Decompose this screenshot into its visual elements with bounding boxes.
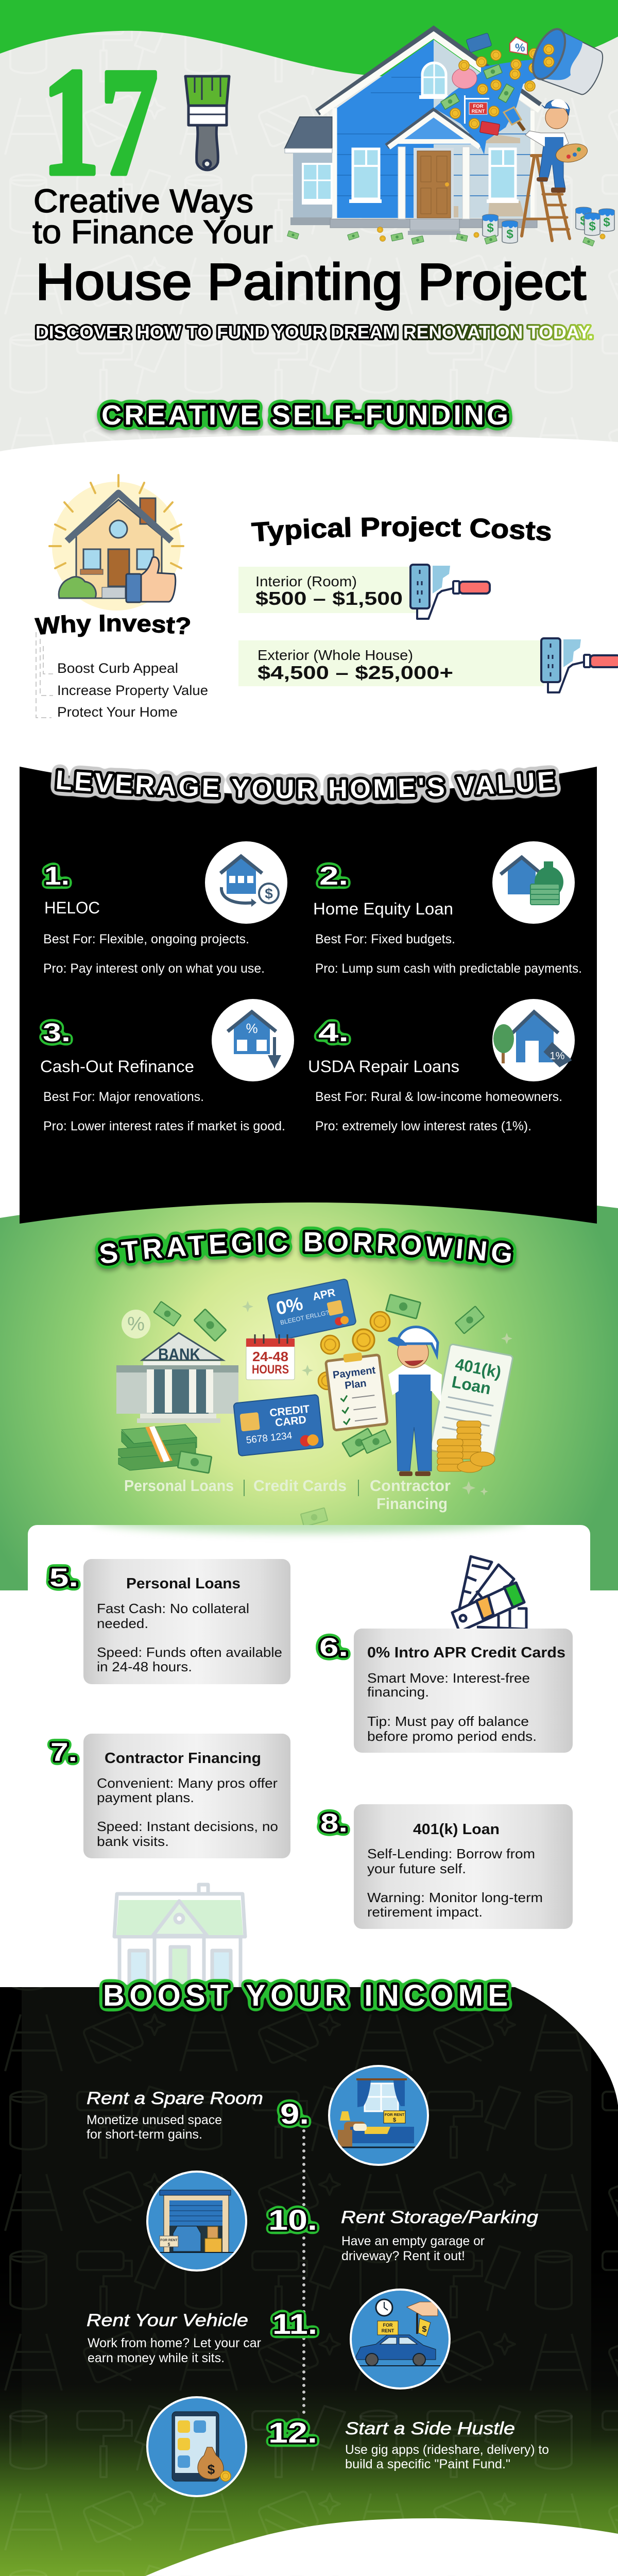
illustration: bank	[116, 1333, 238, 1423]
card text: needed.	[97, 1616, 148, 1631]
icon: paint brush	[185, 76, 229, 170]
illustration: calendar 24-48 hours: HOURS	[252, 1363, 289, 1377]
illustration: credit card: CREDIT	[269, 1403, 311, 1419]
idea 11: rent your vehicle	[87, 2290, 450, 2388]
card text: 401(k) Loan	[413, 1821, 500, 1838]
headline: Creative Ways to Finance Your	[32, 182, 273, 250]
card text	[97, 1575, 282, 1674]
text: for short-term gains.	[87, 2127, 202, 2142]
pig coins bills sign and toolbox in the stream: RENT	[472, 109, 485, 114]
icon: storage unit with car: $	[168, 2242, 170, 2247]
cost box: interior: $500 – $1,500	[255, 588, 403, 609]
badge 10: 10.	[268, 2204, 317, 2236]
heading: Creative Self-Funding: CREATIVE SELF-FUNDING	[101, 400, 508, 431]
badge 3: 3.	[43, 1018, 71, 1047]
badge 12: 12.	[268, 2416, 317, 2449]
text: HELOC: Best For: Flexible, ongoing projects.	[43, 932, 249, 946]
badge 9: 9.	[280, 2097, 309, 2130]
icon: car for rent with keys: FOR	[383, 2323, 393, 2328]
panel: why invest and project costs	[34, 474, 618, 720]
list of reasons: Increase Property Value	[57, 683, 208, 698]
illustration: credit card: CARD	[274, 1414, 307, 1429]
hero section	[0, 0, 618, 464]
icon: house with dollar: $	[265, 886, 273, 902]
heading: Boost Your Income: BOOST YOUR INCOME	[103, 1979, 508, 2012]
green top wave	[0, 0, 618, 78]
card text: Personal Loans	[126, 1575, 241, 1592]
icon: bedroom for rent: $	[393, 2117, 396, 2123]
card text: Convenient: Many pros offer	[97, 1775, 278, 1791]
heading: Leverage Your Home's Value: LEVERAGE YOUR HOME'S VALUE	[50, 765, 561, 805]
text: Work from home? Let your car	[88, 2336, 261, 2350]
text: cash-out refinance	[40, 1057, 285, 1133]
illustration: 0% APR card: APR	[312, 1286, 336, 1303]
bullet connector dashes	[36, 632, 53, 718]
illustration labels: Credit Cards	[253, 1477, 347, 1495]
illustration: bank: BANK	[158, 1345, 200, 1364]
card text	[367, 1645, 565, 1744]
icon: paint roller interior	[410, 565, 490, 619]
illustration labels: Contractor	[370, 1477, 451, 1495]
white wave background	[0, 2518, 618, 2576]
card text: financing.	[367, 1684, 429, 1700]
option 8: 401(k) loan card	[320, 1804, 573, 1929]
icon: house with thumbs up	[49, 475, 183, 611]
main wall	[337, 40, 530, 218]
illustration: contractor character	[388, 1327, 442, 1476]
card text	[97, 1750, 278, 1849]
option 4: USDA repair loans	[308, 999, 575, 1133]
icon: faded house	[114, 1885, 245, 1991]
icon: house with tree and price tag	[492, 999, 575, 1081]
section backdrop: green dome	[0, 1191, 618, 1590]
text	[341, 2208, 538, 2263]
text: cash-out refinance: Pro: Lower interest rates if market is good.	[43, 1119, 285, 1133]
icon: phone with gig apps and money bag: $	[208, 2462, 215, 2477]
card text: Warning: Monitor long-term	[367, 1890, 543, 1905]
tagline: DISCOVER HOW TO FUND YOUR DREAM RENOVATION TODAY.	[36, 323, 593, 343]
option 3: cash-out refinance	[40, 999, 294, 1133]
card text: bank visits.	[97, 1834, 169, 1849]
text: Start a Side Hustle	[345, 2419, 515, 2438]
option 1: HELOC	[43, 841, 287, 976]
icon: colour swatch fan	[452, 1556, 526, 1632]
text: driveway? Rent it out!	[341, 2249, 465, 2263]
pig coins bills sign and toolbox in the stream	[441, 48, 551, 135]
icon: phone with gig apps and money bag	[147, 2397, 246, 2496]
illustration: 401k document	[430, 1344, 513, 1462]
card text: Contractor Financing	[105, 1750, 261, 1767]
cost box: interior: Interior (Room)	[255, 573, 357, 589]
pouring blue paint stream	[434, 59, 542, 155]
text: build a specific "Paint Fund."	[345, 2457, 510, 2471]
illustration: 0% APR card	[267, 1279, 356, 1341]
badge 5: 5.	[49, 1563, 78, 1592]
illustration: 401k document: 401(k)	[454, 1354, 503, 1382]
foundation and steps	[290, 217, 537, 235]
hero background	[0, 0, 618, 464]
credit card and percent house	[466, 33, 527, 55]
badge 7: 7.	[50, 1738, 77, 1767]
panel: white card with borrowing options	[28, 1525, 590, 1987]
illustration: payment plan clipboard: Plan	[344, 1378, 367, 1392]
text: Rent Storage/Parking	[341, 2208, 538, 2227]
panel: strategic borrowing	[93, 1226, 519, 1525]
card text: before promo period ends.	[367, 1728, 537, 1744]
illustration labels	[124, 1477, 451, 1513]
icon: paint roller exterior	[541, 638, 618, 692]
text	[87, 2311, 261, 2365]
card text: Smart Move: Interest-free	[367, 1670, 530, 1686]
headline: House Painting Project: House Painting Project	[36, 253, 586, 310]
card text: your future self.	[367, 1861, 466, 1876]
card text: Self-Lending: Borrow from	[367, 1846, 535, 1861]
white lower backdrop	[0, 1590, 618, 1990]
list of reasons: Boost Curb Appeal	[57, 660, 178, 676]
text: HELOC: Pro: Pay interest only on what you use.	[43, 961, 265, 976]
illustration: cash stacks	[118, 1425, 212, 1473]
annex	[285, 117, 332, 218]
option 6: 0% intro APR credit cards card	[319, 1629, 573, 1753]
illustration labels: Financing	[376, 1495, 448, 1513]
text: home equity loan: Home Equity Loan	[313, 900, 453, 918]
text: USDA repair loans: USDA Repair Loans	[308, 1057, 459, 1076]
white card background	[28, 1525, 590, 1628]
illustration: calendar 24-48 hours: 24-48	[252, 1349, 288, 1364]
icon: car for rent with keys	[350, 2290, 450, 2388]
badge 4: 4.	[318, 1018, 349, 1047]
text	[87, 2089, 263, 2142]
text	[345, 2419, 549, 2471]
card text: retirement impact.	[367, 1904, 483, 1920]
badge 6: 6.	[319, 1633, 348, 1662]
card text: Speed: Funds often available	[97, 1645, 282, 1660]
pig coins bills sign and toolbox in the stream: FOR	[473, 104, 484, 109]
illustration: 0% APR card: 0%	[274, 1293, 305, 1319]
text: home equity loan	[313, 900, 582, 976]
windows	[349, 63, 519, 203]
card text: 0% Intro APR Credit Cards	[367, 1645, 565, 1661]
option 2: home equity loan	[313, 841, 582, 976]
illustration: house with painter and money	[285, 24, 614, 246]
idea 9: rent a spare room	[87, 2066, 428, 2165]
text: Use gig apps (rideshare, delivery) to	[345, 2443, 549, 2457]
heading: Why Invest: Why Invest?	[34, 614, 191, 637]
text: Monetize unused space	[87, 2113, 222, 2127]
illustration: floating coins and bills: %	[127, 1313, 145, 1335]
text: USDA repair loans: Pro: extremely low interest rates (1%).	[315, 1119, 531, 1133]
card text: payment plans.	[97, 1790, 194, 1805]
badge 1: 1.	[44, 861, 70, 890]
paint cans on the ground	[483, 207, 614, 243]
card text: Fast Cash: No collateral	[97, 1601, 249, 1616]
text: USDA repair loans: Best For: Rural & low-income homeowners.	[315, 1090, 562, 1104]
illustration: gold coin stacks	[437, 1421, 495, 1472]
icon: car for rent with keys: $	[422, 2325, 427, 2334]
dotted timeline	[302, 2131, 305, 2416]
white divider curve	[0, 435, 618, 464]
text: USDA repair loans	[308, 1057, 562, 1133]
icon: house with percent and down arrow	[212, 999, 294, 1081]
icon: storage unit with car: FOR RENT	[160, 2239, 178, 2242]
porch and door	[387, 111, 481, 219]
large number 17: 17	[42, 36, 158, 207]
list of reasons	[57, 660, 208, 720]
black panel background	[20, 767, 597, 1224]
text: earn money while it sits.	[88, 2351, 225, 2365]
illustration labels: Personal Loans	[124, 1477, 234, 1495]
dark edge shading	[0, 1987, 618, 2347]
text: HELOC: HELOC	[44, 899, 100, 917]
ladder	[522, 156, 570, 241]
idea 12: start a side hustle	[147, 2397, 549, 2496]
roof trim	[317, 30, 540, 219]
text: Rent Your Vehicle	[87, 2311, 248, 2330]
text: Rent a Spare Room	[87, 2089, 263, 2108]
icon: house with tree and price tag: 1%	[550, 1050, 565, 1062]
cost box: exterior: $4,500 – $25,000+	[258, 662, 453, 683]
credit card and percent house: %	[515, 41, 525, 54]
icon: storage unit with car	[147, 2172, 247, 2270]
card text: in 24-48 hours.	[97, 1659, 192, 1674]
illustration: credit card	[233, 1395, 323, 1456]
heading: Strategic Borrowing: STRATEGIC BORROWING	[93, 1226, 519, 1274]
text: HELOC	[43, 899, 265, 976]
text: home equity loan: Pro: Lump sum cash with predictable payments.	[315, 961, 582, 976]
card text: Speed: Instant decisions, no	[97, 1819, 278, 1834]
sparkles	[242, 1301, 512, 1496]
panel: creative savings and community	[0, 2518, 618, 2576]
card text	[367, 1821, 543, 1920]
icon: car for rent with keys: RENT	[382, 2328, 394, 2333]
option 5: personal loans card	[49, 1559, 290, 1684]
icon: house with money bags	[492, 841, 575, 924]
money on the ground	[287, 227, 605, 246]
tipped paint can	[526, 24, 609, 100]
cost box: interior	[238, 567, 419, 613]
illustration: payment plan clipboard	[325, 1350, 387, 1430]
headline: Creative Ways to Finance Your: Creative Ways	[33, 182, 253, 219]
icon: bedroom for rent	[329, 2066, 428, 2165]
panel: leverage your home's value	[20, 765, 597, 1224]
illustration: floating coins and bills	[122, 1294, 484, 1527]
painter	[504, 99, 589, 193]
cost box: exterior	[238, 640, 544, 686]
icon: house with percent and down arrow: %	[246, 1021, 258, 1036]
badge 8: 8.	[320, 1808, 348, 1837]
tool pattern	[0, 1987, 618, 2576]
illustration: 0% APR card: BLEEOT ERLLG?	[280, 1309, 330, 1326]
hero background pattern of painting tools	[0, 0, 618, 464]
icon: house with dollar	[205, 841, 287, 924]
heading: Typical Project Costs: Typical Project Costs	[251, 516, 551, 546]
illustration: payment plan clipboard: Payment	[332, 1365, 376, 1381]
illustration: calendar 24-48 hours	[246, 1334, 295, 1380]
badge 11: 11.	[272, 2308, 317, 2340]
text: Have an empty garage or	[341, 2234, 485, 2248]
illustration: 401k document: Loan	[450, 1372, 492, 1398]
panel: boost your income	[0, 1979, 618, 2576]
text: cash-out refinance: Cash-Out Refinance	[40, 1057, 194, 1076]
list of reasons: Protect Your Home	[57, 704, 178, 720]
idea 10: rent storage or parking	[147, 2172, 538, 2270]
text: cash-out refinance: Best For: Major renovations.	[43, 1090, 204, 1104]
dark panel background	[0, 1987, 618, 2576]
text: home equity loan: Best For: Fixed budgets.	[315, 932, 455, 946]
cost box: exterior: Exterior (Whole House)	[258, 647, 413, 663]
option 7: contractor financing card	[50, 1734, 290, 1858]
illustration: credit card: 5678 1234	[246, 1430, 293, 1446]
badge 2: 2.	[319, 861, 348, 890]
icon: bedroom for rent: FOR RENT	[385, 2112, 405, 2117]
card top glow	[93, 1525, 525, 1538]
headline: Creative Ways to Finance Your: to Finance Your	[32, 213, 273, 250]
card text: Tip: Must pay off balance	[367, 1714, 529, 1729]
